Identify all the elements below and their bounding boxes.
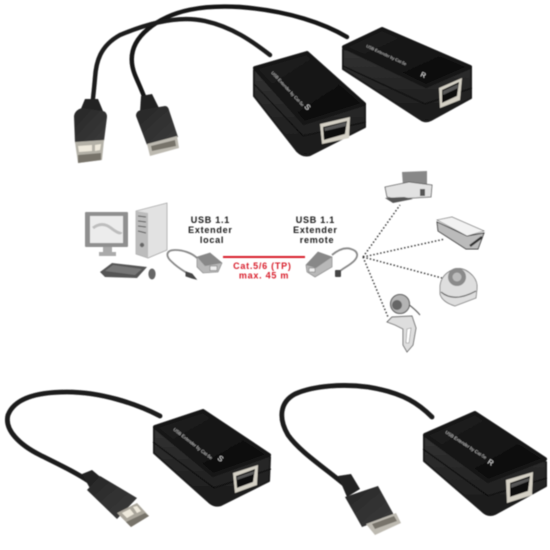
seam <box>153 442 271 488</box>
label text: USB Extender by Cat-5e <box>366 43 408 67</box>
photo: remote unit with USB female plug: R <box>486 457 496 468</box>
USB male plug <box>82 470 149 527</box>
unit top <box>425 413 545 481</box>
photo: local unit with USB male plug <box>7 392 271 527</box>
label text: USB Extender by Cat-5e <box>270 70 306 108</box>
remote unit R: R <box>419 71 427 80</box>
local extender icon <box>167 250 222 279</box>
remote unit R <box>343 29 472 121</box>
cable <box>7 392 160 482</box>
remote extender icon <box>306 248 357 277</box>
dotted links to devices <box>363 205 445 317</box>
label: USB 1.1 Extender remote: USB 1.1 <box>296 215 335 225</box>
USB female plug <box>338 474 401 535</box>
USB male plug <box>74 99 107 163</box>
icon: computer tower <box>136 203 167 258</box>
photo: pair of USB extenders with cables <box>74 7 472 163</box>
label: USB 1.1 Extender local: USB 1.1 <box>191 215 230 225</box>
RJ45 port <box>506 472 533 503</box>
icon: printer <box>385 171 432 203</box>
unit body <box>154 428 270 506</box>
icon: webcam <box>387 294 420 352</box>
label: USB 1.1 Extender remote: remote <box>300 235 334 245</box>
icon: scanner <box>437 217 484 249</box>
cable: local unit <box>92 19 270 108</box>
label: USB 1.1 Extender remote: Extender <box>293 225 338 235</box>
unit top <box>155 411 269 475</box>
photo: remote unit with USB female plug <box>282 385 547 535</box>
icon: computer monitor <box>85 212 128 256</box>
seam <box>423 449 547 496</box>
photo: local unit with USB male plug: S <box>216 453 225 464</box>
RJ45 port <box>320 117 350 144</box>
label: Cat.5/6 max. 45 m: max. 45 m <box>239 270 289 280</box>
USB female plug <box>136 94 179 156</box>
label text: USB Extender by Cat-5e <box>444 430 488 460</box>
RJ45 port <box>233 465 258 493</box>
icon: mouse <box>148 268 156 280</box>
icon: dome camera <box>440 268 477 306</box>
icon: keyboard <box>100 263 147 278</box>
RJ45 port <box>439 78 462 108</box>
red Cat.5/6 cable line <box>223 256 305 258</box>
label: USB 1.1 Extender local: local <box>200 235 224 245</box>
local unit S <box>254 53 366 156</box>
local unit S: S <box>303 102 313 112</box>
label: USB 1.1 Extender local: Extender <box>188 225 233 235</box>
cable: remote unit <box>132 7 347 108</box>
diagram: USB extender connection <box>85 171 484 352</box>
unit body <box>424 436 546 515</box>
label text: USB Extender by Cat-5e <box>172 427 214 461</box>
cable <box>282 385 432 485</box>
label: Cat.5/6 max. 45 m: Cat.5/6 (TP) <box>233 261 292 271</box>
